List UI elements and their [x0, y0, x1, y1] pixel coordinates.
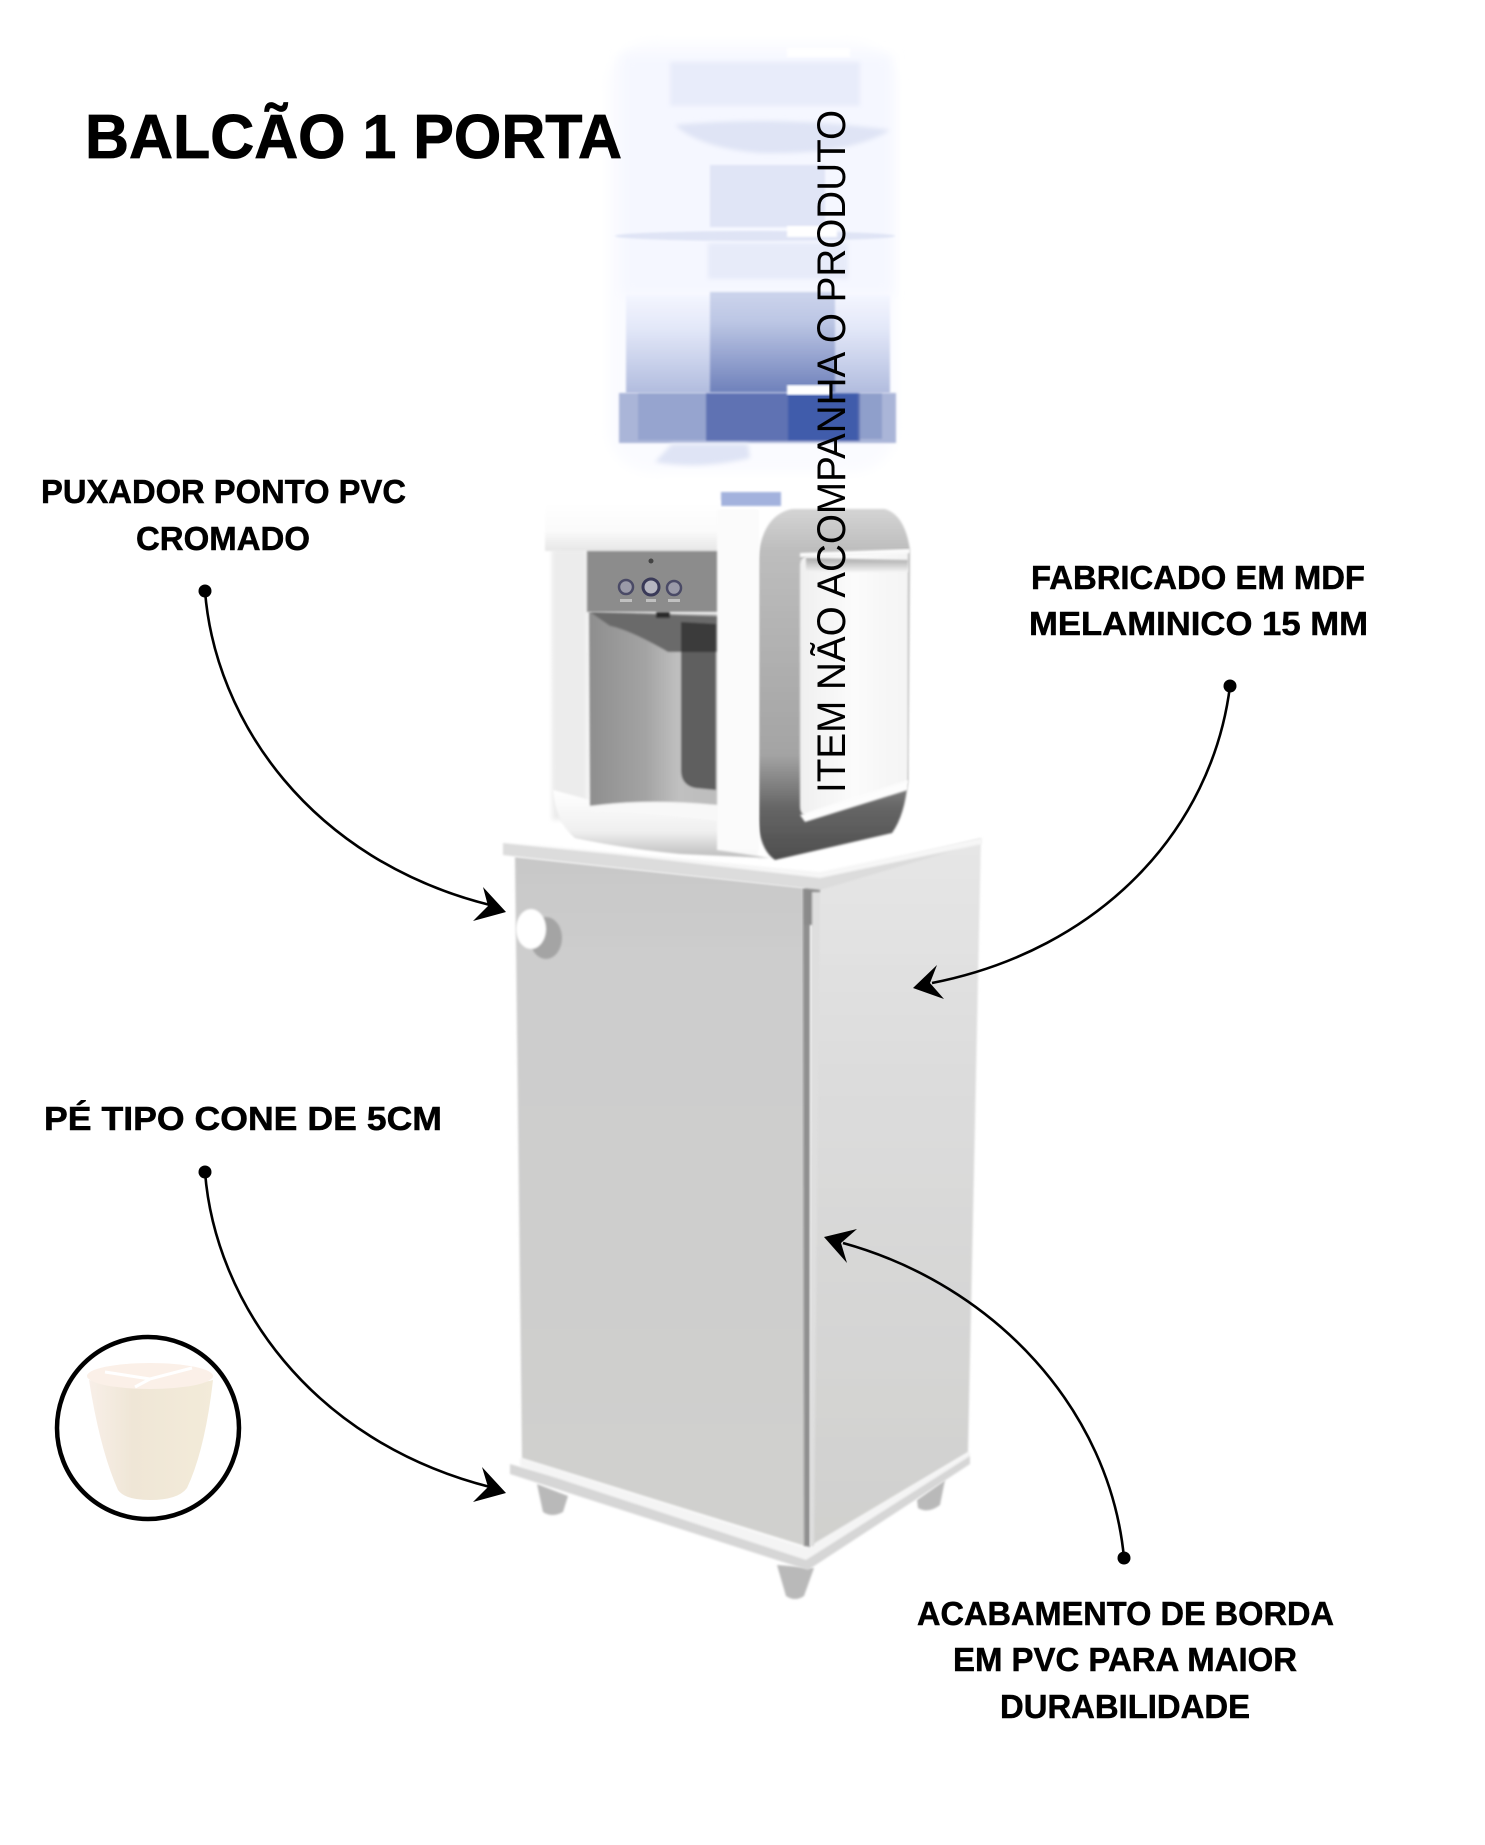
label: acabamento: EM PVC PARA MAIOR [953, 1641, 1297, 1678]
label: fabricado [1029, 559, 1368, 642]
label: fabricado: FABRICADO EM MDF [1031, 559, 1365, 596]
title: BALCÃO 1 PORTA [85, 103, 622, 172]
arrow: pe tipo cone [198, 1166, 506, 1502]
cooler front body [552, 510, 770, 860]
bottle cap [721, 492, 781, 506]
label: acabamento: DURABILIDADE [1000, 1688, 1250, 1725]
cooler side white panel [800, 551, 908, 816]
label: puxador [41, 473, 406, 557]
arrow: puxador [198, 584, 506, 921]
label: puxador: CROMADO [136, 520, 310, 557]
label: puxador: PUXADOR PONTO PVC [41, 473, 406, 510]
label: acabamento: ACABAMENTO DE BORDA [917, 1595, 1334, 1632]
cooler lower front [553, 790, 770, 858]
dispenser niche [589, 612, 717, 820]
icon: cone foot in circle [57, 1337, 239, 1519]
cabinet feet [537, 1480, 945, 1599]
arrow: fabricado [913, 680, 1236, 999]
cabinet top slab [503, 838, 982, 890]
control panel [587, 551, 717, 612]
door handle [516, 909, 562, 959]
label: fabricado: MELAMINICO 15 MM [1029, 605, 1368, 642]
bottle base band [619, 393, 896, 443]
water bottle [608, 42, 896, 472]
water cooler [545, 492, 910, 860]
label: pe tipo cone: PÉ TIPO CONE DE 5CM [44, 1100, 442, 1137]
vertical note: ITEM NÃO ACOMPANHA O PRODUTO [809, 110, 854, 793]
arrow: acabamento [824, 1229, 1130, 1564]
label: acabamento [917, 1595, 1334, 1725]
door edge [803, 888, 810, 1547]
cabinet side panel [810, 838, 981, 1546]
cooler side [758, 509, 910, 860]
cabinet base [510, 1452, 970, 1570]
cabinet door [515, 857, 805, 1546]
cabinet [503, 838, 982, 1599]
